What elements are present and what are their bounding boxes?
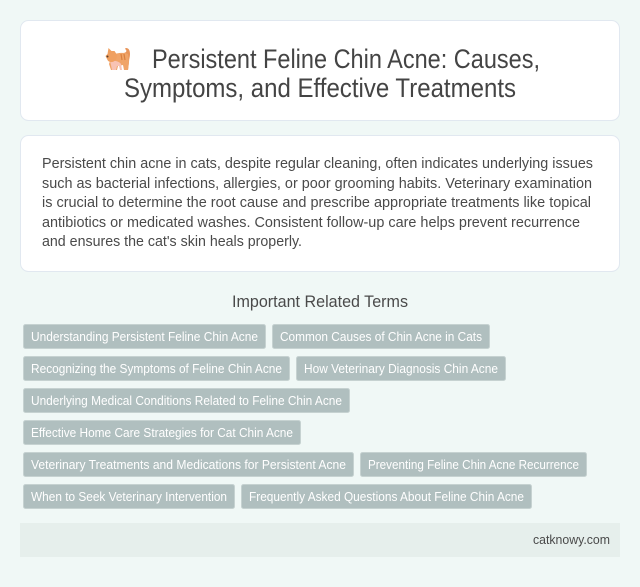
- tag: Veterinary Treatments and Medications for Persistent Acne: [31, 458, 346, 472]
- tag: [24, 420, 300, 444]
- title: Symptoms, and Effective Treatments: [124, 73, 516, 103]
- tag: [24, 356, 290, 380]
- footer: [20, 523, 620, 557]
- title: Persistent Feline Chin Acne: Causes,: [152, 44, 540, 74]
- summary text: Persistent chin acne in cats, despite regular cleaning, often indicates underlying issues: [42, 155, 593, 172]
- tag: [360, 452, 586, 476]
- summary text: [42, 155, 593, 250]
- tag: Recognizing the Symptoms of Feline Chin Acne: [31, 362, 282, 376]
- icon: cat: [106, 48, 130, 70]
- tag: [272, 324, 490, 348]
- summary text: antibiotics or medicated washes. Consistent follow-up care helps prevent recurrence: [42, 214, 580, 231]
- tag: [24, 324, 266, 348]
- tag list: [24, 324, 586, 508]
- summary text: is crucial to determine the root cause and prescribe appropriate treatments like topical: [42, 194, 591, 211]
- tag: Underlying Medical Conditions Related to Feline Chin Acne: [31, 394, 342, 408]
- title: [124, 44, 540, 103]
- tag: Effective Home Care Strategies for Cat Chin Acne: [31, 426, 293, 440]
- tag: When to Seek Veterinary Intervention: [31, 490, 227, 504]
- panel: title card: [20, 20, 620, 120]
- summary text: such as bacterial infections, allergies, or poor grooming habits. Veterinary examination: [42, 175, 592, 192]
- tag: [242, 484, 532, 508]
- tag: Common Causes of Chin Acne in Cats: [280, 330, 482, 344]
- tag: [24, 388, 350, 412]
- tag: Frequently Asked Questions About Feline Chin Acne: [249, 490, 524, 504]
- heading: related terms: Important Related Terms: [232, 293, 408, 311]
- tag: How Veterinary Diagnosis Chin Acne: [304, 362, 498, 376]
- tag: Understanding Persistent Feline Chin Acne: [31, 330, 258, 344]
- tag: [296, 356, 506, 380]
- panel: summary: [20, 136, 620, 272]
- tag: [24, 452, 354, 476]
- summary text: and ensures the cat's skin heals properly.: [42, 233, 302, 250]
- tag: Preventing Feline Chin Acne Recurrence: [368, 458, 579, 472]
- tag: [24, 484, 234, 508]
- footer: catknowy.com: [533, 532, 610, 547]
